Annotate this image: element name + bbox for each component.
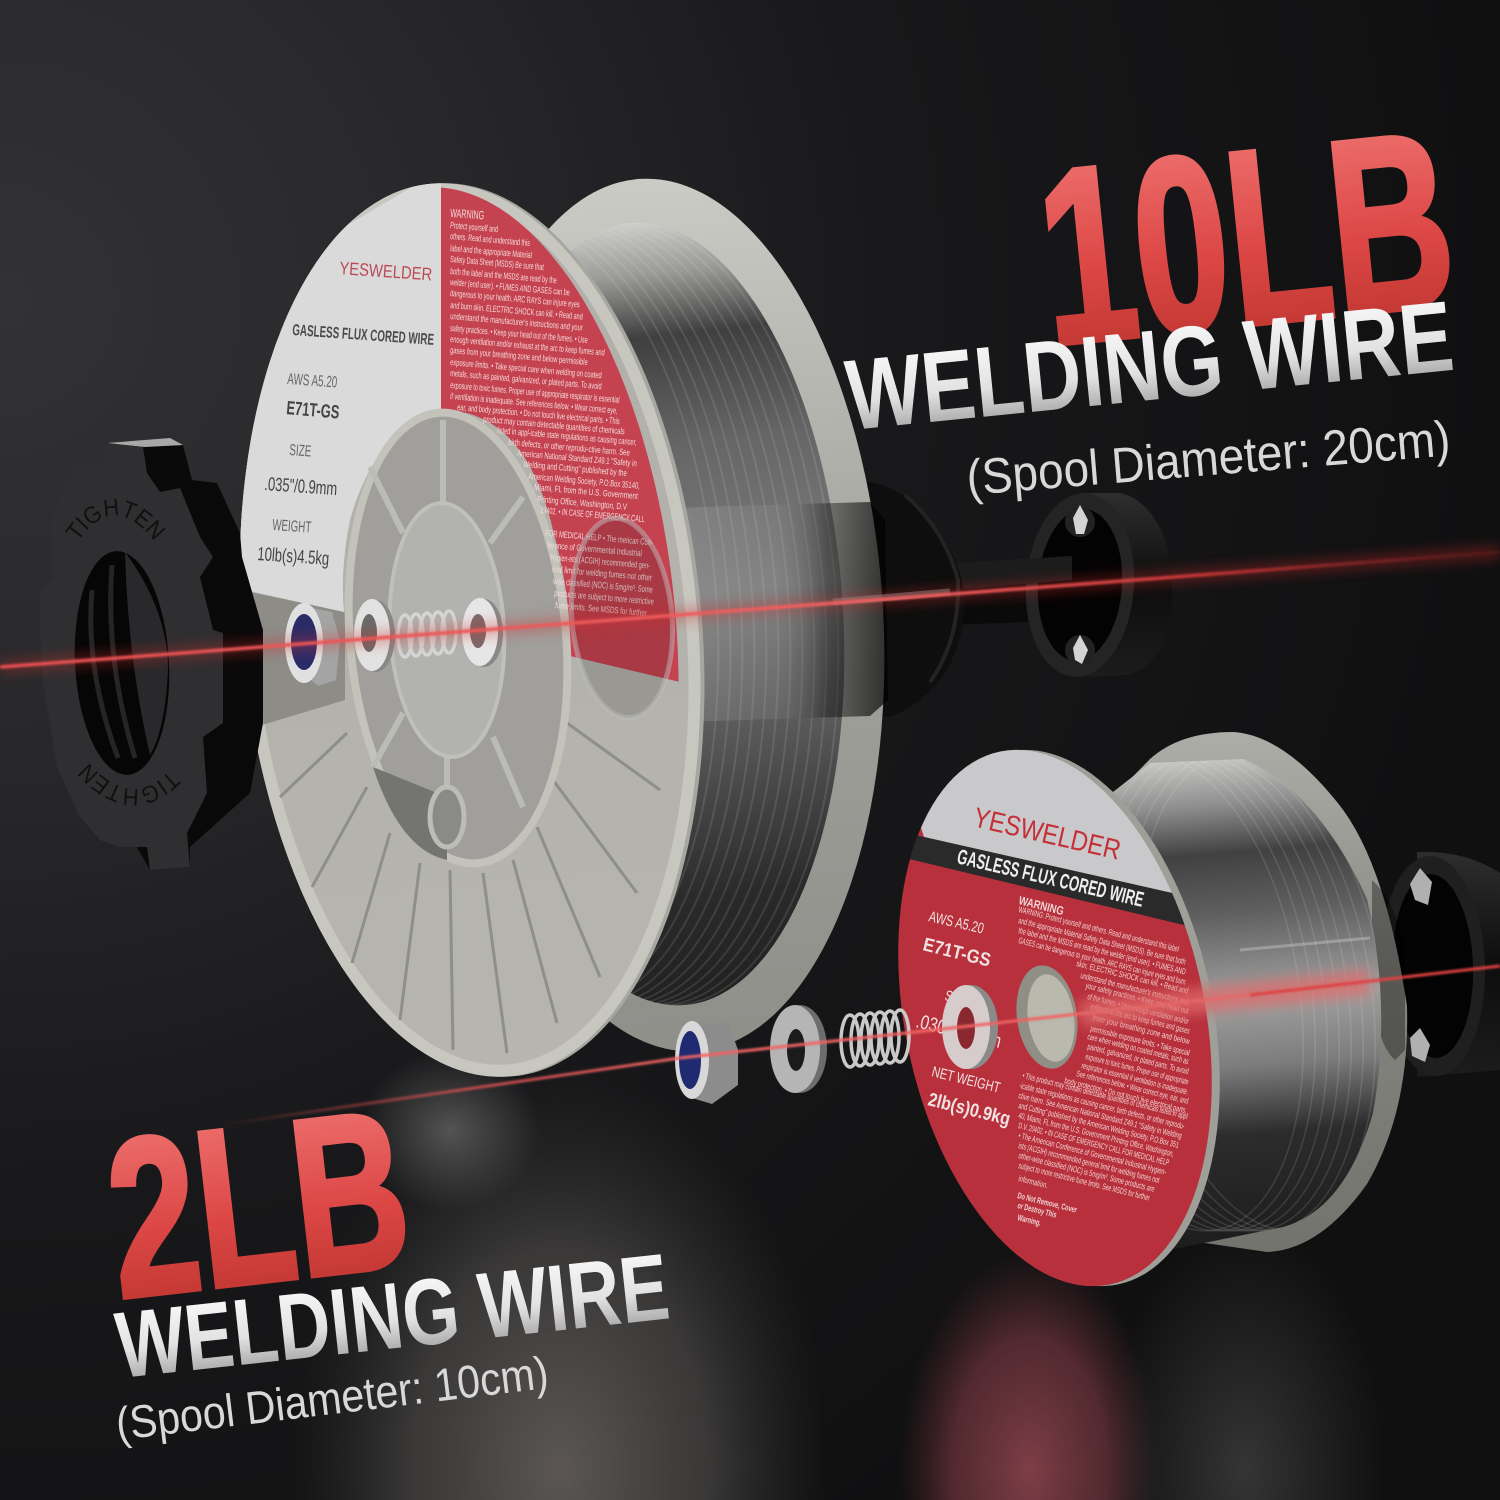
small mount body xyxy=(1417,852,1500,1077)
warning text: large spool: products are subject to more restrictive xyxy=(554,588,654,607)
warning text: large spool: ference of Governmental Industrial xyxy=(547,540,642,558)
white label text: .035"/0.9mm xyxy=(264,474,338,500)
warning text: large spool: safety practices. • Keep your head out of the fumes. • Use xyxy=(450,323,588,345)
face ribs xyxy=(280,723,660,1053)
mount shaft xyxy=(950,558,1075,625)
warning text: large spool: welder (end user). • FUMES AND GASES can be xyxy=(449,277,570,297)
knob face xyxy=(40,443,223,870)
small label specs: AWS A5.20 xyxy=(927,908,985,937)
warning text: small spool: body protection. • Do not touch live electrical parts. xyxy=(1064,1075,1188,1115)
small label specs: E71T-GS xyxy=(921,934,993,972)
warning text: large spool: wise classified (NOC) is 5mg/m³. Some xyxy=(552,576,653,595)
laser beam: small spool xyxy=(220,966,1500,1125)
translucent core highlight through wire xyxy=(1240,938,1370,950)
warning text: small spool: care when welding on coated metals, such as xyxy=(1087,1031,1190,1066)
warning text: small spool xyxy=(1017,893,1192,1228)
small back flange xyxy=(1110,732,1407,1252)
small hole xyxy=(430,787,464,847)
warning text: small spool: ists (ACGIH) recommended general limit for welding fumes not xyxy=(1018,1140,1161,1185)
small spring xyxy=(841,1010,909,1067)
warning text: small spool: respirator is essential if ventilation is inadequate. xyxy=(1081,1060,1190,1097)
warning text: large spool xyxy=(449,206,654,618)
warning text: large spool: Miami, FL from the U.S. Government xyxy=(534,482,639,501)
small mount bolts xyxy=(1410,868,1432,905)
warning text: large spool: 29402. • IN CASE OF EMERGENCY CALL xyxy=(540,505,645,524)
ghost mount through flange xyxy=(1372,880,1405,1060)
small label specs: SIZE xyxy=(943,987,972,1010)
warning text: small spool: GASES can be dangerous to your health. ARC RAYS can injure eyes and burn xyxy=(1018,935,1187,987)
spring xyxy=(398,611,456,657)
small top label xyxy=(921,750,1172,893)
warning text: large spool: American Welding Society, P.O.Box 35140, xyxy=(528,471,640,491)
bolt top xyxy=(1065,505,1095,537)
warning text: large spool: FOR MEDICAL HELP • The merican Con- xyxy=(545,528,653,547)
small washer 1 xyxy=(770,1005,827,1093)
warning text: large spool: eral limit for welding fumes not other xyxy=(552,564,652,583)
small spool xyxy=(898,732,1408,1286)
product name: GASLESS FLUX CORED WIRE xyxy=(292,322,435,349)
small label specs xyxy=(914,908,1012,1130)
wall mount: large spool xyxy=(950,489,1172,681)
translucent core seen through flange xyxy=(660,502,888,722)
warning text: large spool: others. Read and understand this xyxy=(450,231,531,248)
white label text xyxy=(257,258,435,570)
inner hub xyxy=(383,500,511,760)
warning text: large spool: if ventilation is inadequate. See references below. • Wear correct eye, xyxy=(450,391,618,416)
warning text: small spool: your safety practices. • Keep your head out xyxy=(1085,980,1190,1016)
hardware: small spool xyxy=(675,985,998,1104)
knob label bottom: TIGHTEN xyxy=(78,764,181,806)
white label text: AWS A5.20 xyxy=(287,371,338,391)
warning text: small spool: See references below. • Wear correct eye, ear, and xyxy=(1076,1068,1190,1106)
warning text: small spool: and the appropriate Material Safety Data Sheet (MSDS). Be sure that both xyxy=(1018,915,1187,967)
warning text: small spool: skin. ELECTRIC SHOCK can kill. • Read and xyxy=(1076,958,1190,996)
warning text: large spool: fume limits. See MSDS for further xyxy=(555,600,647,618)
warning text: large spool: gases from your breathing zone and below permissible xyxy=(450,345,588,367)
small mount ring xyxy=(1377,854,1489,1078)
warning text: small spool: • This product may contain detectable quantities of chemicals listed in appl xyxy=(1022,1070,1189,1121)
white label text: E71T-GS xyxy=(286,398,340,424)
bolt bottom xyxy=(1065,635,1095,665)
warning text: large spool: Printing Office, Washington, D.V xyxy=(537,494,627,512)
knob label top: TIGHTEN xyxy=(65,498,166,540)
lock nut xyxy=(285,603,340,686)
brand: YESWELDER xyxy=(339,258,433,284)
mount ring xyxy=(1020,489,1140,681)
warning text: small spool: WARNING: Protect yourself and others. Read and understand this label xyxy=(1018,904,1180,954)
warning text: small spool: 40, Miami, FL from the U.S. Government Printing Office, Washington, xyxy=(1018,1110,1175,1159)
warning text: large spool: label and the appropriate Material xyxy=(450,243,532,260)
warning text: small spool: exposure to toxic fumes. Proper use of appropriate xyxy=(1085,1051,1190,1087)
floor reflections xyxy=(290,1050,1385,1500)
laser beam: large spool xyxy=(0,552,1500,667)
translucent dark patch under knob xyxy=(252,592,345,725)
warning text: small spool: permissible exposure limits. • Take special xyxy=(1090,1023,1191,1058)
red warning label segment xyxy=(441,188,679,682)
warning text: large spool: dangerous to your health. ARC RAYS can injure eyes xyxy=(450,288,580,309)
small label specs: NET WEIGHT xyxy=(930,1063,1002,1097)
white label text: WEIGHT xyxy=(272,517,312,537)
warning text: small spool: information. xyxy=(1018,1173,1049,1190)
small dark band xyxy=(910,836,1185,926)
warning text: small spool: D.V. 20402. • IN CASE OF EMERGENCY CALL FOR MEDICAL HELP xyxy=(1018,1120,1171,1167)
warning text: small spool: or Destroy This xyxy=(1017,1200,1058,1220)
small label name: GASLESS FLUX CORED WIRE xyxy=(955,845,1146,912)
hardware: large spool xyxy=(285,598,503,686)
warning text: small spool: and Cutting" published by the American Welding Society, P.O.Box 351 xyxy=(1018,1100,1180,1150)
knob extrusion xyxy=(80,445,263,870)
warning text: small spool: other-wise classified (NOC) is 5mg/m³. Some products are xyxy=(1018,1150,1156,1194)
small label brand: YESWELDER xyxy=(971,802,1124,866)
warning text: small spool: painted, galvanized, or plated parts. To avoid xyxy=(1087,1041,1190,1076)
spool hub black xyxy=(840,482,964,717)
knob xyxy=(62,438,263,870)
hole xyxy=(326,399,590,877)
warning text: large spool: Protect yourself and xyxy=(450,220,499,234)
warning text: large spool: product may contain detectable quantities of chemicals xyxy=(483,414,625,436)
translucent ghost core ring over label xyxy=(563,514,681,722)
warning text: small spool: from your breathing zone and below xyxy=(1092,1012,1192,1046)
warning text: large spool: birth defects, or other reprodu-ctive harm. See xyxy=(508,437,630,458)
knob hole xyxy=(69,549,175,777)
small wire winding xyxy=(1113,759,1382,1249)
wire winding xyxy=(571,223,844,1006)
warning text: small spool: • The American Conference of Governmental Industrial Hygien- xyxy=(1018,1130,1168,1177)
small rim xyxy=(861,721,1265,1315)
warning text: small spool: subject to more restrictive fume limits. See MSDS for further xyxy=(1018,1160,1151,1203)
small label specs: .030"/0.8mm xyxy=(914,1011,1004,1053)
warning text: small spool: of the fumes. • Use enough ventilation and/or xyxy=(1087,991,1190,1026)
warning text: large spool: enough ventilation and/or exhaust at the arc to keep fumes and xyxy=(450,334,605,358)
spool diameter: large: (Spool Diameter: 20cm) xyxy=(964,410,1452,506)
white label text: 10lb(s)4.5kg xyxy=(257,544,330,570)
threaded rod seen through spool xyxy=(833,592,950,602)
mount body xyxy=(1080,493,1172,677)
white label text: SIZE xyxy=(289,442,312,461)
spool diameter: small: (Spool Diameter: 10cm) xyxy=(113,1346,551,1450)
outer raised rim xyxy=(240,183,700,1077)
warning text: large spool: exposure to toxic fumes. Proper use of appropriate respirator is essential xyxy=(450,380,620,405)
small label specs: 2lb(s)0.9kg xyxy=(926,1089,1012,1130)
warning text: small spool: ctive harm. See American National Standard Z49.1 "Safety in Welding xyxy=(1018,1090,1183,1141)
small face xyxy=(853,721,1257,1315)
warning text: large spool: both the label and the MSDS are read by the xyxy=(450,266,557,285)
warning text: large spool: Hygien-ists (ACGIH) recommended gen- xyxy=(550,552,650,571)
warning text: large spool: and burn skin. ELECTRIC SHOCK can kill. • Read and xyxy=(450,300,583,322)
warning text: small spool: the label and the MSDS are read by the welder (end user). • FUMES AND xyxy=(1018,925,1187,977)
large spool xyxy=(204,164,950,1096)
subheading: welding wire small: WELDING WIRE xyxy=(111,1234,674,1398)
warning text: large spool: Welding and Cutting" published by the xyxy=(523,459,627,478)
back flange xyxy=(425,165,911,1065)
small spool mount xyxy=(1377,852,1500,1078)
small washer 2 xyxy=(942,985,998,1069)
washer 1 xyxy=(354,599,395,672)
heading: 2LB: 2LB xyxy=(96,1062,421,1346)
warning text: large spool: Safety Data Sheet (MSDS) Be sure that xyxy=(450,254,545,272)
warning text: large spool: understand the manufacturer's instructions and your xyxy=(450,311,583,333)
warning text: small spool: Do Not Remove, Cover xyxy=(1017,1190,1079,1215)
warning text: small spool: exhaust at the arc to keep fumes and gases xyxy=(1090,1001,1191,1036)
warning text: large spool: WARNING xyxy=(450,206,485,222)
front face xyxy=(204,164,736,1096)
front rim xyxy=(208,164,740,1096)
warning text: small spool: -icable state regulations as causing cancer, birth defects, or other reprodu- xyxy=(1019,1080,1186,1131)
warning text: small spool: understand the manufacturer's instructions and xyxy=(1080,970,1190,1007)
warning text: small spool: WARNING xyxy=(1017,893,1065,918)
washer 2 xyxy=(462,598,503,667)
knob highlight xyxy=(107,438,183,447)
warning text: small spool: Warning. xyxy=(1017,1212,1042,1228)
white label segment xyxy=(240,183,441,612)
warning text: large spool: ear, and body protection. • Do not touch live electrical parts. • This xyxy=(457,402,620,426)
spokes xyxy=(370,420,523,807)
hole cavity shading xyxy=(373,767,447,860)
warning text: large spool: listed in appl-icable state regulations as causing cancer, xyxy=(497,425,637,447)
warning text: large spool: exposure limits. • Take special care when welding on coated xyxy=(450,357,602,380)
warning text: large spool: metals, such as painted, galvanized, or plated parts. To avoid xyxy=(450,368,602,391)
warning text: large spool: American National Standard Z49.1 "Safety in xyxy=(517,448,637,468)
small label hole xyxy=(1016,965,1078,1069)
small lock nut xyxy=(675,1021,738,1104)
